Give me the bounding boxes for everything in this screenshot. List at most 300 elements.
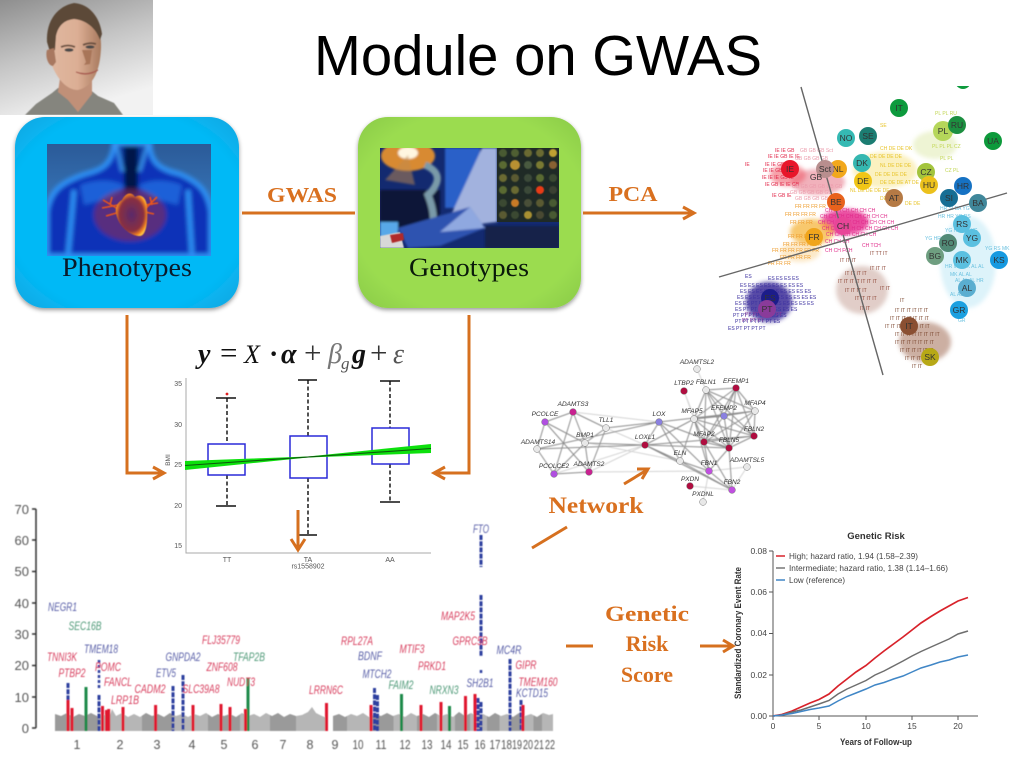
network labels: BMP1 — [576, 432, 594, 439]
Manhattan gene labels: PRKD1 — [418, 659, 446, 673]
PCA point clouds: IT IT IT IT — [845, 271, 867, 277]
Manhattan chromosome labels: 11 — [376, 738, 387, 752]
PCA point clouds: IT IT IT IT IT IT — [895, 308, 928, 314]
PCA arrow — [583, 182, 694, 219]
PCA country markers: YG — [966, 233, 978, 243]
Manhattan chromosome labels: 18 — [501, 738, 512, 752]
Manhattan chromosome labels: 5 — [221, 738, 228, 752]
chart y tick labels: 0.08 — [750, 546, 767, 556]
PCA point clouds: GB GB GB GB GB GB — [792, 184, 843, 190]
box plot y ticks: 25 — [174, 462, 182, 469]
PCA country markers: BA — [972, 198, 984, 208]
regression formula: α — [281, 339, 297, 370]
Genetic Risk Score label: Score — [621, 662, 673, 687]
regression formula: + — [370, 335, 387, 370]
PCA country markers: SI — [945, 193, 953, 203]
network edges — [537, 369, 755, 502]
PCA country markers: PL — [938, 126, 948, 136]
Manhattan y labels: 30 — [15, 627, 29, 642]
network labels — [520, 359, 766, 498]
PCA point clouds: CH CH CH — [825, 239, 850, 245]
box plot boxes — [208, 428, 409, 478]
Manhattan chromosome labels: 14 — [440, 738, 452, 752]
PCA point clouds: FR FR FR FR — [795, 204, 826, 210]
box plot axes — [186, 378, 431, 553]
Manhattan chromosome labels: 16 — [474, 738, 486, 752]
PCA point clouds: IT IT IT IT IT IT IT IT — [885, 324, 930, 330]
PCA country markers: HR — [957, 181, 969, 191]
PCA point clouds: GB GB GB GB — [795, 156, 829, 162]
PCA point clouds: IT IT IT IT IT IT IT IT — [895, 332, 940, 338]
PCA point clouds: CH CH CH CH CH CH — [825, 208, 876, 214]
PCA point clouds: IT IT IT IT IT IT IT — [895, 340, 934, 346]
chart x axis title: Years of Follow-up — [840, 737, 912, 747]
PCA country markers: NO — [840, 133, 853, 143]
PCA point clouds: YG HR RS YG — [945, 228, 978, 234]
Manhattan gene labels: MC4R — [496, 643, 522, 657]
PCA country markers: Sct — [819, 164, 832, 174]
PCA point clouds: IE IE GB IE IE — [768, 154, 800, 160]
PCA point clouds: ES PT PT ES ES ES ES ES — [735, 307, 798, 313]
network arrow — [532, 469, 648, 548]
PCA point clouds — [728, 111, 1010, 370]
PCA country markers: IT — [895, 103, 903, 113]
box plot y label: BMI — [165, 454, 172, 466]
PCA country markers: SE — [862, 131, 874, 141]
Manhattan gene labels: KCTD15 — [516, 686, 548, 700]
PCA point clouds: IE IE GB IE — [765, 162, 791, 168]
arrow: phenotypes to regression — [127, 315, 164, 479]
PCA point clouds: ES ES PT ES ES ES ES ES ES ES — [735, 301, 814, 307]
PCA point clouds: AL AL GR — [950, 292, 972, 298]
box plot y ticks — [174, 381, 182, 550]
PCA point clouds: ES — [745, 274, 752, 280]
chart y tick labels: 0.04 — [750, 628, 767, 638]
network nodes — [534, 366, 758, 505]
PCA point clouds: CZ PL — [945, 168, 959, 174]
PCA point clouds: CH CH FCH — [825, 248, 853, 254]
regression formula: + — [304, 335, 321, 370]
Manhattan chromosome labels: 12 — [400, 738, 411, 752]
box plot x labels: rs1558902 — [291, 564, 325, 570]
PCA point clouds: CH DE DE DK — [880, 146, 913, 152]
PCA point clouds: IT IT — [860, 306, 870, 312]
network labels: ADAMTSL5 — [729, 457, 765, 464]
PCA point clouds: FR FR FR FR — [780, 255, 811, 261]
arrow: down to Manhattan plot — [291, 510, 305, 550]
Manhattan chromosome labels: 4 — [189, 738, 196, 752]
curve: intermediate risk — [773, 631, 968, 716]
PCA country markers: SK — [924, 352, 936, 362]
Manhattan blue loci — [68, 535, 521, 731]
phenotypes label: Phenotypes — [62, 253, 192, 282]
Manhattan chromosome labels: 10 — [352, 738, 364, 752]
network labels: MFAP5 — [681, 408, 703, 415]
network labels: FBN1 — [701, 460, 718, 467]
chart y axis title: Standardized Coronary Event Rate — [733, 567, 743, 699]
GWAS label: GWAS — [267, 183, 337, 207]
regression formula: ε — [393, 339, 404, 370]
gene network — [520, 359, 766, 505]
PCA point clouds: GB GB GB GB GB — [790, 190, 832, 196]
PCA point clouds: IT IT IT IT IT — [905, 356, 932, 362]
PCA point clouds: IE GB IE — [772, 193, 792, 199]
PCA point clouds: MK AL AL — [950, 272, 972, 278]
network labels: ADAMTS3 — [557, 401, 589, 408]
network labels: LOXL1 — [635, 434, 655, 441]
curve: low risk — [773, 655, 968, 716]
Genetic Risk Score label: Risk — [626, 631, 669, 656]
Manhattan y labels: 50 — [15, 564, 29, 579]
PCA point clouds: FR FR FR — [790, 220, 813, 226]
phenotypes card background — [15, 117, 239, 308]
PCA point clouds: IE IE IE GB IE — [762, 175, 794, 181]
PCA point clouds: IT TT IT — [870, 251, 888, 257]
panel: phenotypes — [15, 117, 239, 308]
PCA point clouds: CH CH CH CH CH CH CH CH — [820, 214, 888, 220]
PCA point clouds: ES PT PT PT PT — [728, 326, 766, 332]
Manhattan chromosome labels: 3 — [154, 738, 161, 752]
PCA point clouds: CH CH CH CH CH CH CH CH CH — [822, 226, 898, 232]
PCA country markers: RO — [942, 238, 955, 248]
Manhattan gene labels: SEC16B — [68, 619, 102, 633]
BMI box plot — [165, 378, 431, 570]
Manhattan gene labels: NEGR1 — [48, 600, 77, 614]
PCA point clouds: IE — [745, 162, 750, 168]
network labels: PXDN — [681, 476, 699, 483]
Manhattan gene labels: TNNI3K — [47, 650, 78, 664]
Manhattan chromosome labels: 22 — [545, 738, 555, 752]
Manhattan gene labels: MAP2K5 — [441, 609, 475, 623]
PCA point clouds: FR FR FR FR FR — [783, 242, 822, 248]
network labels: EFEMP1 — [723, 378, 749, 385]
box plot y ticks: 30 — [174, 422, 182, 429]
PCA point clouds: PL PL — [940, 156, 954, 162]
PCA point clouds: CH CH CH CH CH CH — [826, 232, 877, 238]
Manhattan green loci — [86, 678, 450, 731]
PCA point clouds: FR FR FR FR — [785, 212, 816, 218]
PCA point clouds: IT IT IT IT IT IT IT — [890, 316, 929, 322]
PCA country markers: DE — [857, 176, 869, 186]
PCA point clouds: IT IT IT IT IT IT — [900, 348, 933, 354]
PCA point clouds: IT IT IT — [870, 266, 886, 272]
PCA point clouds: PT PT PT PT PT — [745, 312, 782, 318]
network labels: PXDNL — [692, 491, 714, 498]
network labels: ADAMTSL2 — [679, 359, 715, 366]
Manhattan gene labels: LRP1B — [111, 693, 139, 707]
PCA scatter plot — [719, 73, 1010, 375]
box plot x labels — [223, 557, 395, 570]
PCA point clouds: ES ES ES ES ES ES ES ES ES ES — [737, 295, 817, 301]
network labels: MFAP2 — [693, 431, 715, 438]
PCA point clouds: DE AT AT — [880, 196, 901, 202]
network labels: LTBP2 — [674, 380, 694, 387]
chart title: Genetic Risk — [847, 531, 905, 542]
genetic risk chart — [733, 531, 978, 747]
chart y tick labels — [750, 546, 767, 721]
network labels: MFAP4 — [744, 400, 766, 407]
chart y tick labels: 0.00 — [750, 711, 767, 721]
PCA point clouds: PL PL PL CZ — [932, 144, 961, 150]
PCA point clouds: ES ES ES ES — [768, 276, 800, 282]
Manhattan gene labels: LRRN6C — [309, 683, 343, 697]
outlier point — [226, 393, 228, 395]
box plot x labels: TA — [304, 557, 313, 564]
Manhattan gene labels: RPL27A — [341, 634, 373, 648]
PCA point clouds: IE IE GB — [775, 148, 795, 154]
PCA point clouds: IT IT IT IT IT IT IT — [838, 279, 877, 285]
Manhattan gene labels: CADM2 — [134, 682, 166, 696]
chart legend: High; hazard ratio, 1.94 (1.58–2.39) — [789, 551, 918, 561]
PCA point clouds: GB GB GB GB — [795, 196, 829, 202]
network labels: EFEMP2 — [711, 405, 737, 412]
Manhattan plot — [15, 502, 558, 752]
Manhattan gene labels: ZNF608 — [206, 660, 238, 674]
PCA point clouds: IT IT IT IT — [855, 296, 877, 302]
Manhattan gene labels: ETV5 — [156, 666, 176, 680]
Manhattan y labels: 40 — [15, 596, 29, 611]
Manhattan chromosome labels: 6 — [252, 738, 259, 752]
PCA country markers: CZ — [920, 167, 932, 177]
PCA point clouds: DE DE DE DE — [875, 172, 908, 178]
Manhattan gene labels: GIPR — [516, 658, 537, 672]
Manhattan gene labels: MTCH2 — [362, 667, 392, 681]
PCA point clouds: IT IT — [880, 286, 890, 292]
PCA country markers: RU — [951, 120, 963, 130]
PCA point clouds: FR FR FR — [788, 234, 811, 240]
chart x tick labels: 10 — [861, 721, 871, 731]
box plot whiskers — [227, 380, 390, 535]
icon: microarray and DNA collage — [380, 141, 559, 248]
PCA point clouds: PL PL RU — [935, 111, 957, 117]
PCA axes — [719, 87, 1007, 375]
Manhattan y axis — [32, 509, 36, 728]
Manhattan chromosome labels: 1 — [74, 738, 81, 752]
regression formula: g — [351, 339, 366, 370]
PCA point clouds: IT IT IT IT — [845, 288, 867, 294]
PCA country markers: UA — [987, 136, 999, 146]
chart legend: Low (reference) — [789, 575, 845, 585]
PCA point clouds: YG RS MK — [985, 246, 1010, 252]
Manhattan gene labels: MTIF3 — [400, 642, 425, 656]
PCA point clouds: GB GB GB Sct — [800, 148, 834, 154]
PCA point clouds: IT IT IT — [840, 258, 856, 264]
PCA country markers: IT — [905, 321, 913, 331]
Manhattan gene labels: FAIM2 — [388, 678, 414, 692]
PCA country markers: KS — [993, 255, 1005, 265]
icon: torso with glowing heart — [47, 144, 211, 256]
regression formula: = — [220, 335, 237, 370]
PCA country markers: FR — [808, 232, 820, 242]
PCA point clouds: ES ES ES ES ES ES ES ES — [740, 283, 804, 289]
PCA point clouds: IT — [900, 298, 904, 304]
arrow: genotypes to regression — [434, 315, 469, 479]
chart legend: Intermediate; hazard ratio, 1.38 (1.14–1.66) — [789, 563, 948, 573]
PCA point clouds: CH TCH — [862, 243, 881, 249]
Genetic Risk Score label: Genetic — [605, 601, 689, 626]
Manhattan chromosome labels: 15 — [458, 738, 469, 752]
regression formula: β — [327, 339, 342, 370]
PCA point clouds: NL DE DE DE — [880, 163, 912, 169]
Manhattan gene labels: SLC39A8 — [182, 682, 220, 696]
Manhattan y labels: 20 — [15, 658, 29, 673]
Manhattan chromosome labels: 20 — [523, 738, 533, 752]
Manhattan y labels: 60 — [15, 533, 29, 548]
network labels: PCOLCE — [532, 411, 559, 418]
Manhattan chromosome labels: 13 — [422, 738, 433, 752]
network labels: FBN2 — [724, 479, 741, 486]
PCA point clouds: PT PT PT PT ES ES ES — [733, 313, 787, 319]
regression band — [185, 444, 431, 470]
PCA country markers: PT — [762, 304, 772, 314]
line from Manhattan plot to genetic risk score — [566, 644, 593, 648]
Manhattan chromosome labels: 9 — [332, 738, 339, 752]
PCA point clouds: HR SI BA YG — [940, 206, 970, 212]
regression line — [185, 448, 431, 466]
network labels: ELN — [674, 450, 687, 457]
Manhattan gene labels: NUDT3 — [227, 675, 255, 689]
Manhattan y labels — [15, 502, 29, 736]
chart legend — [776, 551, 948, 585]
PCA point clouds: AL AL AL HR — [955, 278, 984, 284]
PCA label: PCA — [608, 182, 658, 206]
Manhattan chromosome labels: 19 — [512, 738, 522, 752]
network labels: ADAMTS14 — [520, 439, 556, 446]
PCA point clouds: IE IE GB IE — [763, 168, 789, 174]
Manhattan y labels: 10 — [15, 690, 29, 705]
PCA point clouds: FR FR FR — [768, 261, 791, 267]
Manhattan gene labels: BDNF — [358, 649, 382, 663]
PCA country markers: RS — [956, 219, 968, 229]
Network label: Network — [548, 493, 644, 518]
network labels: TLL1 — [599, 417, 614, 424]
Manhattan chromosome labels: 21 — [534, 738, 544, 752]
box plot y ticks: 15 — [174, 543, 182, 550]
PCA country markers: GB — [810, 172, 822, 182]
Manhattan gene labels: TFAP2B — [233, 650, 265, 664]
PCA point clouds: FR FR FR FR FR FR — [772, 248, 819, 254]
chart x tick labels: 5 — [817, 721, 822, 731]
GWAS line — [242, 212, 355, 214]
PCA point clouds: HR MK MK AL AL — [945, 264, 984, 270]
Manhattan FTO and MC4R extra dots — [99, 660, 481, 688]
PCA country markers: CH — [837, 221, 849, 231]
Manhattan gene labels: FANCL — [104, 675, 132, 689]
PCA point clouds: ES ES ES ES ES ES ES ES ES — [740, 289, 812, 295]
portrait photo — [0, 0, 153, 115]
Manhattan gene labels: GPRC5B — [452, 634, 488, 648]
network labels: FBLN5 — [719, 437, 739, 444]
network labels: FBLN2 — [744, 426, 764, 433]
network labels: ADAMTS2 — [573, 461, 605, 468]
Manhattan gene labels: FTO — [473, 522, 489, 536]
chart x tick labels — [771, 721, 963, 731]
regression formula: y — [195, 339, 211, 370]
PCA country markers — [758, 73, 1008, 366]
Manhattan chromosome labels: 2 — [117, 738, 124, 752]
PCA point clouds: GR — [958, 318, 966, 324]
PCA country markers: NL — [833, 164, 844, 174]
Manhattan chromosome labels: 17 — [490, 738, 501, 752]
PCA country markers: DK — [856, 158, 868, 168]
box plot x labels: AA — [385, 557, 395, 564]
PCA point clouds: DE DE DE DE — [870, 154, 903, 160]
PCA country markers: BG — [929, 251, 941, 261]
box plot y ticks: 35 — [174, 381, 182, 388]
Manhattan gene labels: GNPDA2 — [166, 650, 201, 664]
Manhattan gene labels: NRXN3 — [430, 683, 459, 697]
PCA point clouds: PT PT PT PT PT ES — [735, 319, 781, 325]
PCA point clouds: IE GB IE IE GB — [765, 182, 800, 188]
box plot caps — [216, 380, 400, 535]
arrow to PCA plot — [583, 207, 694, 219]
network labels: PCOLCE2 — [539, 463, 570, 470]
Manhattan chromosome labels: 7 — [280, 738, 287, 752]
curve: high risk — [773, 598, 968, 716]
PCA country markers: HU — [923, 180, 935, 190]
genotypes card background — [358, 117, 581, 308]
Manhattan gene labels: TMEM18 — [84, 642, 118, 656]
Manhattan background signal — [55, 707, 553, 731]
Manhattan gene labels: FLJ35779 — [202, 633, 240, 647]
PCA point clouds: NL DE DE DE DE — [850, 188, 890, 194]
Manhattan gene labels: POMC — [95, 660, 121, 674]
panel: genotypes — [358, 117, 581, 308]
box plot x labels: TT — [223, 557, 232, 564]
box plot y ticks: 20 — [174, 503, 182, 510]
network labels: FBLN1 — [696, 379, 716, 386]
chart y tick labels: 0.06 — [750, 587, 767, 597]
chart x tick labels: 0 — [771, 721, 776, 731]
Manhattan gene labels: SH2B1 — [466, 676, 494, 690]
PCA point clouds: PT PT PT — [742, 318, 764, 324]
PCA country markers: BE — [830, 197, 842, 207]
Manhattan gene labels: PTBP2 — [58, 666, 86, 680]
PCA point clouds: HR HR YG RS — [938, 214, 971, 220]
regression formula: · — [269, 339, 278, 370]
Manhattan y labels: 70 — [15, 502, 29, 517]
chart axes — [769, 551, 978, 720]
chart x tick labels: 20 — [953, 721, 963, 731]
PCA country markers: GR — [953, 305, 965, 315]
GWAS connector — [242, 183, 355, 213]
network labels: LOX — [652, 411, 666, 418]
PCA point clouds: DE DE DE AT DE — [880, 180, 920, 186]
Manhattan chromosome labels — [74, 738, 555, 752]
PCA country markers: MK — [956, 255, 969, 265]
Manhattan red loci — [68, 694, 523, 731]
Manhattan y labels: 0 — [22, 721, 29, 736]
Manhattan gene labels — [47, 522, 558, 707]
genotypes label: Genotypes — [409, 253, 529, 282]
PCA point clouds: DE DE — [905, 201, 921, 207]
Manhattan chromosome labels: 8 — [307, 738, 314, 752]
title: Module on GWAS — [314, 24, 762, 88]
PCA point clouds: SE — [880, 123, 887, 129]
regression formula: g — [341, 354, 350, 373]
chart x tick labels: 15 — [907, 721, 917, 731]
PCA point clouds: CH CH CH CH CH CH CH CH CH — [818, 220, 894, 226]
PCA country markers: IE — [786, 164, 794, 174]
PCA point clouds: IT IT — [912, 364, 922, 370]
chart y tick labels: 0.02 — [750, 670, 767, 680]
PCA country markers: ES — [764, 293, 776, 303]
regression formula: X — [243, 340, 261, 369]
arrow: genetic risk score to curve — [700, 640, 733, 652]
PCA point clouds: YG HR — [925, 236, 941, 242]
Manhattan gene labels: TMEM160 — [518, 675, 558, 689]
PCA country markers: AL — [962, 283, 972, 293]
